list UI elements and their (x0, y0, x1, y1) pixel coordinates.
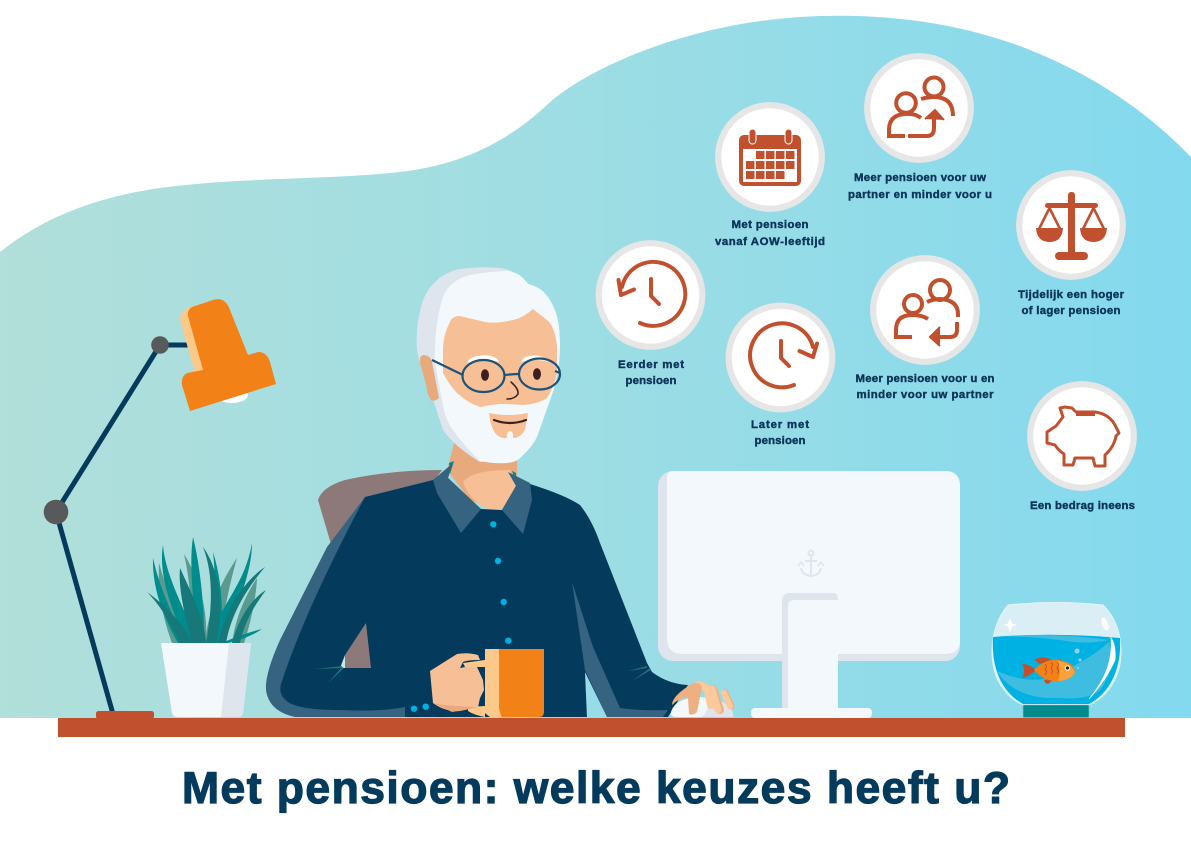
arm gap with chair (345, 623, 371, 668)
label: Later met (751, 419, 809, 431)
label: Een bedrag ineens (1030, 500, 1135, 512)
shirt (266, 478, 688, 717)
icon: scales (1036, 192, 1107, 260)
option: meer pensioen voor uw partner (848, 56, 992, 201)
icon: clock back (618, 262, 685, 326)
label: Meer pensioen voor u en (856, 373, 995, 385)
label (1018, 289, 1125, 317)
label: Eerder met (618, 359, 684, 371)
label (856, 373, 995, 401)
label: vanaf AOW-leeftijd (715, 236, 825, 248)
mouse and hand (671, 683, 733, 717)
label: minder voor uw partner (856, 389, 994, 401)
option: tijdelijk hoger of lager (1018, 173, 1125, 317)
goldfish (1022, 658, 1075, 684)
monitor (658, 471, 960, 718)
sleeve creases (315, 666, 344, 683)
sleeve fold right (572, 582, 668, 717)
option: meer pensioen voor u (856, 258, 995, 401)
desk lamp (44, 299, 276, 719)
icon: clock forward (750, 323, 817, 387)
label: pensioen (626, 375, 677, 387)
label (715, 219, 825, 248)
label: of lager pensioen (1022, 305, 1121, 317)
option: later met pensioen (729, 306, 832, 447)
label: partner en minder voor u (848, 189, 992, 201)
fish bowl (992, 602, 1121, 718)
man at desk (266, 267, 688, 717)
icon: people arrow back (896, 280, 958, 346)
option: eerder met pensioen (599, 243, 702, 387)
label (848, 172, 992, 201)
collar (433, 463, 481, 533)
label: Meer pensioen voor uw (854, 172, 986, 184)
icon: anchor (798, 550, 824, 576)
label: Met pensioen (732, 219, 809, 231)
icon: piggy bank (1047, 407, 1119, 466)
desk (58, 718, 1125, 737)
plant (147, 537, 266, 717)
shirt buttons (411, 521, 511, 712)
icon: people arrow up (889, 78, 953, 136)
option: met pensioen vanaf AOW-leeftijd (715, 105, 825, 248)
label: pensioen (754, 435, 806, 447)
title: Met pensioen: welke keuzes heeft u? (182, 764, 1010, 813)
label (618, 359, 684, 387)
head (417, 267, 560, 463)
mug and hand (430, 649, 544, 717)
glasses (432, 358, 560, 392)
icon: calendar (739, 129, 801, 186)
neck (447, 440, 517, 511)
label: Tijdelijk een hoger (1018, 289, 1125, 301)
office chair (318, 470, 442, 544)
label (751, 419, 809, 447)
option: een bedrag ineens (1030, 384, 1135, 512)
